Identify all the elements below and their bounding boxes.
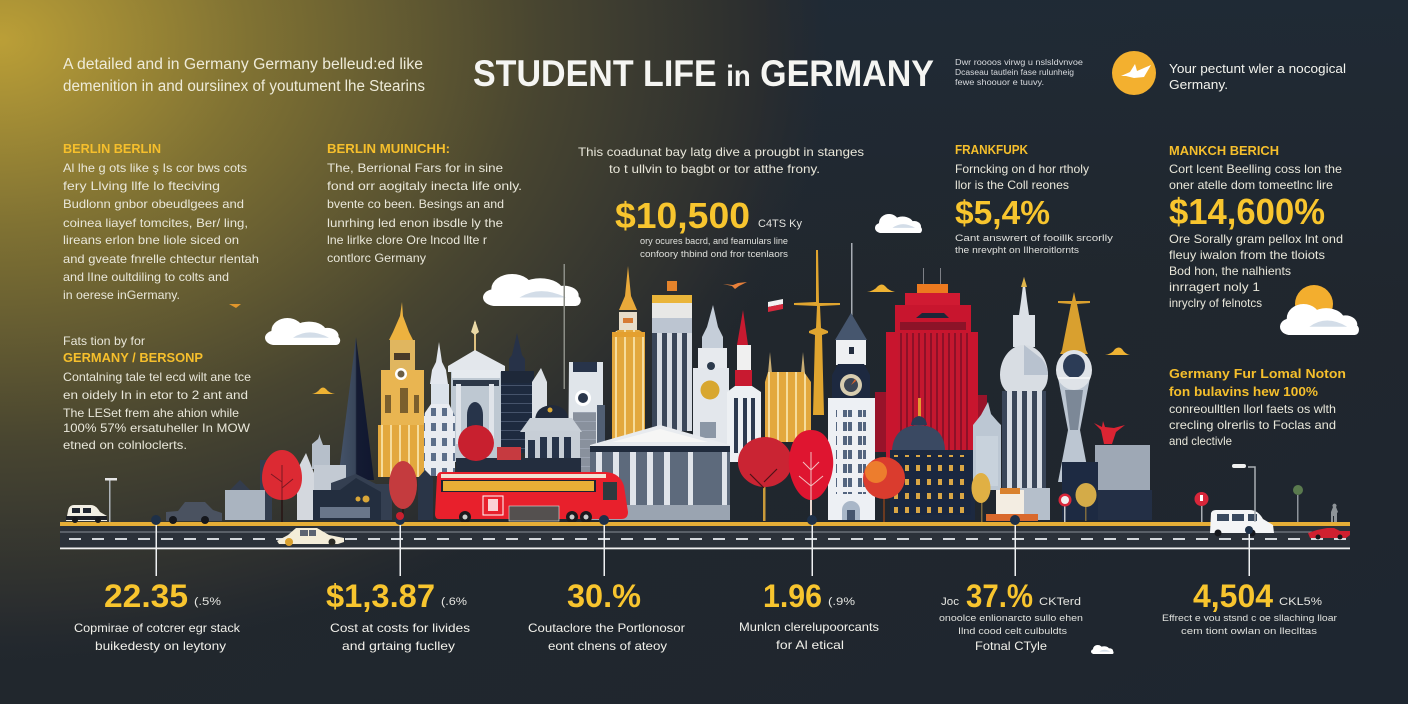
building: small houses left [225, 434, 346, 520]
panel: Germany person: GERMANY / BERSONP [63, 351, 203, 365]
panel: Berlin: Al lhe g ots like ş Is cor bws cots [63, 161, 247, 175]
stat: 4,504 [1162, 578, 1337, 636]
stat: 37.%: onoolce enlionarcto sullo ehen [939, 613, 1083, 623]
panel: Berlin Munich: lne lirlke clore Ore lncod llte r [327, 233, 487, 247]
panel: Mankch Berich: $14,600% [1169, 191, 1325, 232]
vehicle: grey car [166, 502, 222, 524]
stat: 1.96: Munlcn clerelupoorcants [739, 620, 879, 634]
stat: 4,504: cem tiont owlan on lleclltas [1181, 626, 1318, 636]
stat: 4,504: CKL5% [1279, 596, 1322, 608]
icon: sun and cloud [1280, 285, 1359, 335]
stat: 37.%: Fotnal CTyle [975, 639, 1047, 653]
panel: Mankch Berich: Bod hon, the nalhients [1169, 264, 1291, 278]
panel: Germany person: etned on colnloclerts. [63, 438, 187, 452]
panel: centre cost [578, 145, 864, 259]
panel: Germany person: The LESet frem ahe ahion while [63, 406, 239, 420]
street pole far right [1293, 485, 1303, 522]
stat: 37.% [939, 578, 1083, 653]
tree: red left [262, 450, 302, 522]
panel: centre cost: C4TS Ky [758, 218, 802, 230]
panel: Germany person: en oidely In in etor to 2 ant and [63, 388, 248, 402]
panel: Mankch Berich: Cort lcent Beelling coss lon the [1169, 162, 1342, 176]
sign: red [1194, 492, 1208, 522]
stat: 1.96: (.9% [828, 596, 855, 608]
bus [435, 472, 628, 523]
panel: Mankch Berich: inrragert noly 1 [1169, 280, 1260, 294]
panel: Berlin: coinea liayef tomcites, Ber/ ling, [63, 216, 248, 230]
stat: $1,3.87: (.6% [441, 596, 467, 608]
panel: Frankfurt: $5,4% [955, 194, 1050, 231]
tree: bright red [789, 430, 833, 522]
pedestrian [1331, 504, 1338, 522]
building: navy dome block [890, 398, 975, 520]
building: white clock tower [693, 305, 729, 468]
panel: Mankch Berich: fleuy iwalon from the tloiots [1169, 248, 1325, 262]
stat: 37.%: CKTerd [1039, 596, 1081, 608]
tree: red round [458, 425, 494, 461]
stat: 30.%: Coutaclore the Portlonosor [528, 621, 685, 635]
thin poles behind [564, 243, 852, 389]
stems and markers [151, 512, 1253, 576]
panel: centre cost: confoory thbind ond fror tcenlaors [640, 249, 789, 259]
road [60, 522, 1350, 549]
vehicle: cream car [277, 528, 344, 546]
panel: centre cost: to t ullvin to bagbt or tor atthe frony. [609, 162, 820, 176]
vehicle: red car [1308, 528, 1350, 540]
stat: 4,504: Effrect e vou stsnd c oe sllaching lloar [1162, 613, 1337, 623]
small header note: Dwr roooos virwg u nslsldvnvoe [955, 58, 1084, 67]
panel: Berlin: lireans erlon bne liole siced on [63, 233, 239, 247]
clouds and sky details [229, 214, 1130, 654]
panel: Germany local note: and clectivle [1169, 434, 1232, 448]
stat: 1.96: for Al etical [776, 638, 844, 652]
panel: Berlin Munich: fond orr aogitaly inecta life only. [327, 179, 522, 193]
panel: Germany local note: crecling olrerlis to Foclas and [1169, 418, 1336, 432]
panel: Frankfurt: Cant answrert of fooillk srcorlly [955, 233, 1114, 243]
tree: yellow [972, 473, 990, 522]
intro text: A detailed and in Germany Germany belleud:ed like [63, 56, 423, 73]
skyline [225, 243, 1152, 523]
header note right: Your pectunt wler a nocogical [1169, 62, 1346, 76]
panel: Berlin Munich: BERLIN MUINICHH: [327, 142, 450, 156]
stat: 30.%: 30.% [567, 578, 641, 614]
panel: Berlin: BERLIN BERLIN [63, 142, 161, 156]
panel: Mankch Berich: MANKCH BERICH [1169, 144, 1279, 158]
panel: Mankch Berich: Ore Sorally gram pellox lnt ond [1169, 232, 1343, 246]
street lamp left [105, 478, 117, 522]
panel: Germany person: Fats tion by for [63, 334, 145, 348]
tree: muted red [389, 461, 417, 520]
building: globe tower [1056, 292, 1092, 482]
panel: Berlin: Budlonn gnbor obeudlgees and [63, 197, 244, 211]
panel: Germany local note: Germany Fur Lomal Noton [1169, 367, 1346, 381]
building: portico [590, 425, 730, 520]
panel: Frankfurt: llor is the Coll reones [955, 178, 1069, 192]
panel: Berlin: and gveate fnrelle chtectur rlentah [63, 252, 259, 266]
building: white gothic tower [424, 342, 455, 476]
building: white window tower [828, 313, 875, 520]
stat: 1.96 [739, 578, 879, 652]
stat: 22.35: buikedesty on leytony [95, 639, 226, 653]
building: dark tower [501, 333, 534, 453]
street lamp right [1232, 464, 1255, 522]
panel: Berlin Munich [327, 142, 522, 265]
panel: Germany person: 100% 57% ersatuheller In MOW [63, 421, 251, 435]
building: silver dome tower [1000, 277, 1048, 491]
intro text: demenition in and oursiinex of youtument lhe Stearins [63, 78, 425, 95]
red roof accent [497, 447, 521, 460]
icon: yellow circle with bird [1112, 51, 1156, 95]
stat: $1,3.87: $1,3.87 [326, 578, 435, 614]
vehicles and street furniture [66, 464, 1350, 546]
building: white small tower [532, 368, 547, 430]
panel: Berlin Munich: contlorc Germany [327, 251, 426, 265]
stat: 1.96: 1.96 [763, 578, 822, 614]
panel: Berlin [63, 142, 259, 302]
building: white tower with dial [568, 362, 605, 477]
panel: centre cost: ory ocures bacrd, and fearnulars line [640, 236, 788, 246]
vehicle: white van [1210, 510, 1274, 536]
panel: Berlin: and lIne oultdiling to colts and [63, 270, 229, 284]
panel: centre cost: This coadunat bay latg dive a prougbt in stanges [578, 145, 864, 159]
panel: Germany person [63, 334, 251, 452]
building: dome hall [520, 405, 582, 471]
building: dark obelisk [338, 337, 374, 480]
panel: Mankch Berich: inryclry of felnotcs [1169, 296, 1262, 310]
small header note [955, 58, 1084, 87]
title: STUDENT LIFE in GERMANY [473, 53, 934, 94]
panel: Berlin: fery Llving llfe lo fteciving [63, 179, 220, 193]
vehicle: left van [66, 505, 107, 523]
header note right [1169, 62, 1346, 92]
panel: Berlin: in oerese inGermany. [63, 288, 180, 302]
small header note: Dcaseau tautlein fase rulunheig [955, 68, 1074, 77]
building: red spire tower [727, 310, 761, 462]
tree: orange red [863, 457, 905, 522]
header note right: Germany. [1169, 78, 1228, 92]
building: gold mast [794, 250, 840, 415]
stat: 30.%: eont clnens of ateoy [548, 639, 667, 653]
panel: Berlin Munich: bvente co been. Besings an and [327, 197, 504, 211]
stat: $1,3.87 [326, 578, 470, 653]
panel: Frankfurt: FRANKFUPK [955, 143, 1028, 157]
stat: $1,3.87: Cost at costs for livides [330, 621, 470, 635]
building: classical temple [448, 320, 505, 462]
panel: Mankch Berich [1169, 144, 1343, 310]
panel: Frankfurt: the nrevpht on Ilheroitlornts [955, 245, 1080, 255]
house: dark gable block [313, 470, 433, 520]
building: grey small tower [973, 402, 1001, 490]
building: gold tall tower [612, 266, 645, 439]
stat: 37.%: Ilnd cood celt culbuldts [958, 626, 1068, 636]
panel: centre cost: $10,500 [615, 195, 750, 236]
panel: Berlin Munich: lunrhing led enon ibsdle ly the [327, 216, 503, 230]
stat: $1,3.87: and grtaing fuclley [342, 639, 455, 653]
panel: Berlin Munich: The, Berrional Fars for in sine [327, 161, 503, 175]
panel: Germany local note [1169, 367, 1346, 448]
building: gold clock tower [378, 302, 424, 477]
stat: 37.%: Joc [941, 596, 960, 608]
panel: Frankfurt: Forncking on d hor rtholy [955, 162, 1089, 176]
building: red tower [875, 268, 987, 470]
stat: 30.% [528, 578, 685, 653]
panel: Germany local note: conreoulltlen llorl faets os wlth [1169, 402, 1336, 416]
building: right low blocks [986, 421, 1152, 521]
panel: Germany local note: fon bulavins hew 100% [1169, 385, 1318, 399]
building: long dark wall behind bus [456, 458, 581, 472]
panel: Frankfurt [955, 143, 1114, 255]
stat: 22.35: (.5% [194, 596, 221, 608]
panel: Mankch Berich: oner atelle dom tomeetlnc lire [1169, 178, 1333, 192]
building: gold block [765, 352, 811, 442]
building: grey tower [652, 281, 692, 431]
stat: 4,504: 4,504 [1193, 578, 1273, 614]
panel: Germany person: Contalning tale tel ecd wilt ane tce [63, 370, 251, 384]
stat: 22.35: 22.35 [104, 578, 188, 614]
sign: road sign [1058, 494, 1072, 522]
small header note: fewe shoouor e tuuvy. [955, 78, 1044, 87]
stat: 22.35 [74, 578, 241, 653]
tree: red wide [738, 437, 792, 521]
stat: 22.35: Copmirae of cotcrer egr stack [74, 621, 241, 635]
tree: yellow small [1076, 483, 1096, 521]
stat: 37.%: 37.% [966, 578, 1033, 614]
intro text [63, 56, 425, 95]
